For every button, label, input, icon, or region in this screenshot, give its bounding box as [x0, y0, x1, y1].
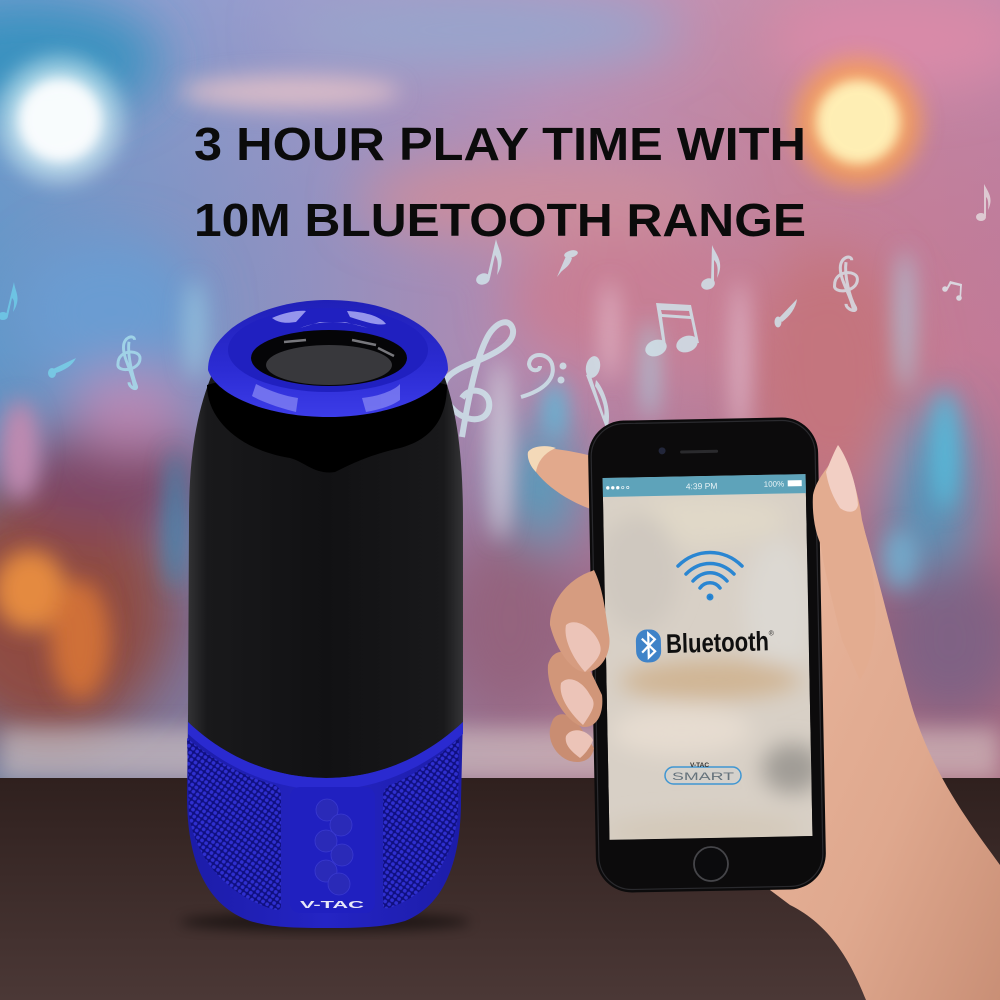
phone screen — [597, 474, 824, 847]
icon: wifi — [678, 552, 742, 600]
top right note — [976, 184, 991, 221]
V-TAC smart logo: SMART — [672, 771, 734, 783]
brand logo: V-TAC — [300, 899, 365, 911]
status bar: 4:39 PM — [686, 481, 718, 491]
status bar: 100% — [764, 479, 784, 489]
ring highlights — [252, 311, 400, 412]
music note icons — [0, 184, 991, 437]
right treble clef — [834, 257, 857, 311]
bluetooth logo — [636, 626, 775, 663]
bluetooth logo: Bluetooth — [666, 626, 769, 659]
home button — [694, 847, 728, 881]
rim strip — [188, 722, 463, 790]
phone body — [587, 417, 827, 893]
bass clef — [521, 355, 566, 397]
hand: thumb — [813, 445, 875, 680]
speaker blue top ring — [208, 300, 448, 417]
eighth notes — [475, 239, 502, 287]
speaker blue fabric base — [187, 715, 463, 928]
upper finger nail — [528, 446, 556, 472]
hand: upper finger — [528, 448, 600, 512]
title — [194, 118, 806, 246]
smartphone — [587, 417, 827, 893]
earpiece and camera — [659, 446, 718, 454]
mesh panel right — [383, 738, 459, 908]
small beamed note — [942, 281, 962, 301]
stage lights — [0, 58, 922, 186]
title: 10M BLUETOOTH RANGE — [194, 194, 806, 246]
control panel — [290, 787, 375, 913]
finger nails — [561, 622, 601, 758]
speaker top opening — [251, 330, 407, 386]
speaker shadow — [180, 913, 470, 931]
thumb nail — [826, 445, 858, 512]
hand: palm and wrist — [770, 470, 1000, 1000]
V-TAC smart logo: V-TAC — [690, 762, 709, 769]
left notes — [0, 282, 18, 320]
ring inner slope — [228, 308, 428, 392]
blurred concert background — [0, 0, 1000, 780]
status bar — [603, 474, 806, 497]
speaker — [180, 300, 470, 931]
floor / table — [0, 778, 1000, 1000]
title: 3 HOUR PLAY TIME WITH — [194, 118, 806, 170]
inverted note — [584, 355, 609, 428]
mesh panel left — [187, 738, 281, 910]
bluetooth logo: ® — [769, 629, 775, 637]
V-TAC smart logo — [665, 762, 741, 784]
speaker black glossy body — [188, 365, 463, 778]
large treble clef — [444, 322, 513, 437]
dark body reflection — [207, 350, 447, 472]
hand: front fingers — [548, 570, 610, 762]
beamed notes — [643, 303, 700, 359]
